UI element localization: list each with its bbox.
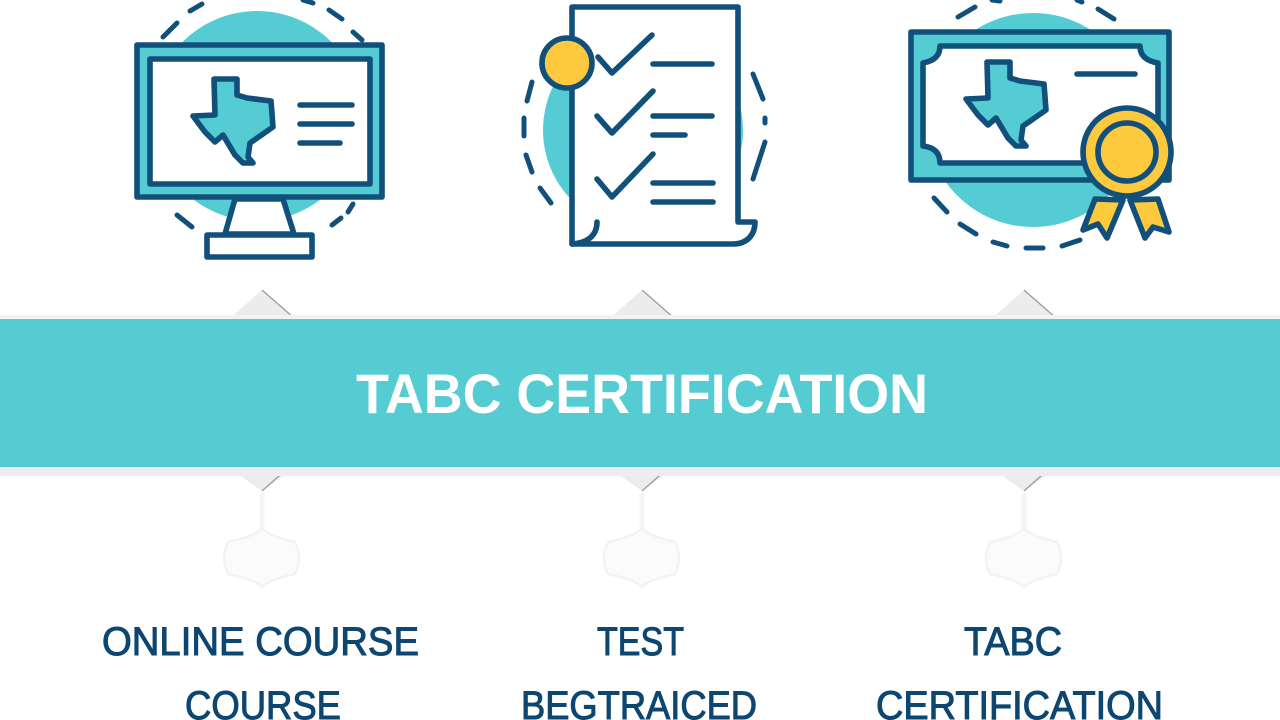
- connector node: step three: [986, 290, 1061, 587]
- title banner: [0, 315, 1280, 476]
- icon: checklist document: [524, 7, 765, 244]
- label: TABC certification: [876, 620, 1163, 720]
- title: TABC CERTIFICATION: [356, 362, 928, 425]
- label: test: TEST: [597, 620, 684, 664]
- connector node: step one: [224, 290, 299, 587]
- label: online course: [102, 620, 419, 720]
- label: test: [521, 620, 757, 720]
- icon: computer monitor with Texas: [137, 0, 382, 257]
- icon: certificate with award ribbon: [911, 0, 1171, 248]
- label: online course: ONLINE COURSE: [102, 620, 419, 664]
- label: TABC certification: TABC: [964, 620, 1062, 664]
- connector node: step two: [604, 290, 679, 587]
